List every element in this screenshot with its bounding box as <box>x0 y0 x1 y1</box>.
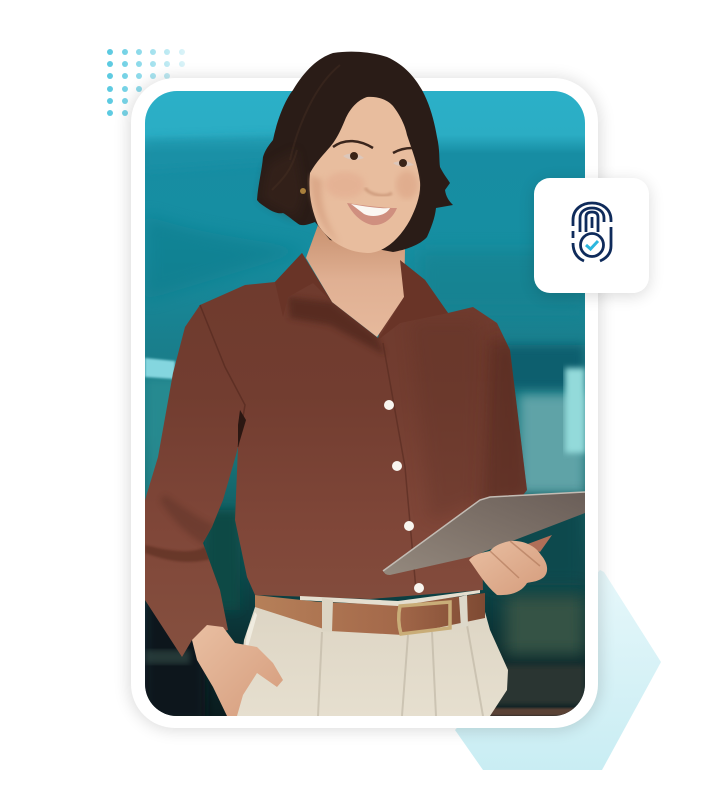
dot grid <box>107 49 185 116</box>
eyebrows <box>333 141 373 148</box>
sleeve behind tablet hand <box>525 535 552 552</box>
face <box>309 97 420 253</box>
decorative hexagon <box>455 570 661 770</box>
fingerprint badge <box>534 178 649 296</box>
shirt shading <box>145 297 535 562</box>
nose <box>365 188 392 195</box>
blurred office background <box>145 91 585 720</box>
earring <box>300 188 306 194</box>
sleeve seam <box>200 305 245 447</box>
smile <box>347 203 397 225</box>
neck <box>306 225 405 337</box>
shirt buttons <box>384 400 424 593</box>
pant pleats <box>318 625 483 716</box>
icon: fingerprint with check <box>573 203 611 261</box>
woman <box>145 52 585 716</box>
pants <box>236 607 508 716</box>
hair strands <box>272 65 340 190</box>
hand holding tablet <box>469 541 547 595</box>
white photo card <box>129 78 600 730</box>
hair <box>257 52 453 252</box>
belt <box>255 593 485 635</box>
hand in pocket <box>192 625 283 716</box>
belt buckle <box>399 602 450 634</box>
tablet <box>383 492 585 575</box>
placket <box>383 343 416 590</box>
shirt body <box>145 253 527 657</box>
photo panel <box>145 91 585 720</box>
eyes <box>343 152 414 167</box>
collar <box>275 253 448 340</box>
